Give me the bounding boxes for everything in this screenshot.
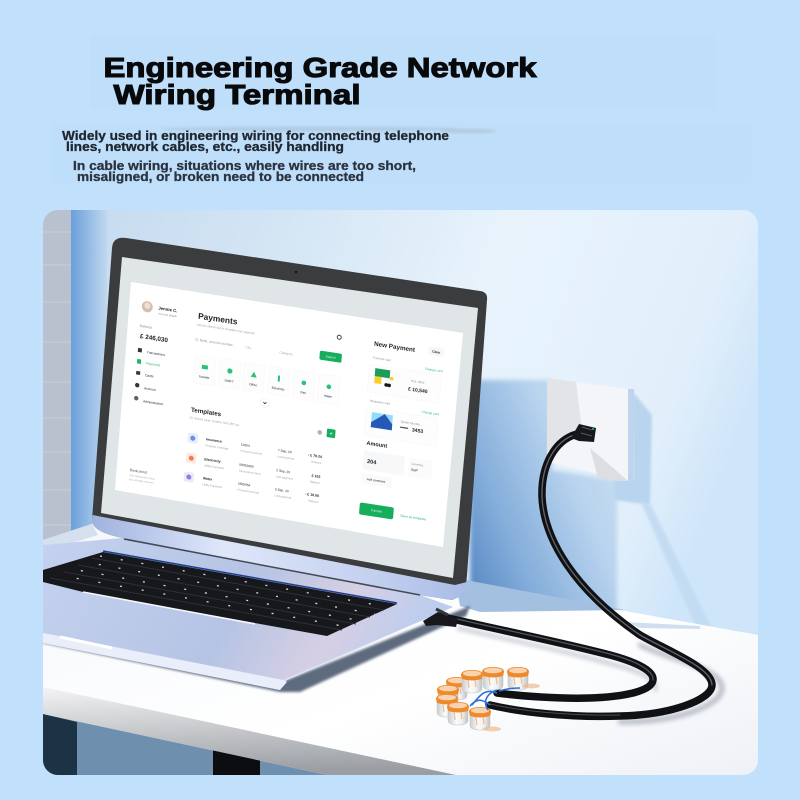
templates list: Balance [311,459,322,465]
faded backdrop behind header text [52,35,752,184]
templates list: Utility Payments [204,463,225,470]
wiring terminal connectors [436,667,540,732]
templates list: Property coverage [205,443,229,451]
templates list: Utility Payments [202,482,223,489]
keyboard [43,551,397,636]
templates list: 7 Sep, 20 [278,448,292,454]
templates list: + [329,431,333,438]
templates list: Templates [191,407,222,418]
sidebar profile and navigation: Cards [145,373,154,379]
templates list: 10254 [241,443,250,448]
new payment panel: Amount [366,441,388,450]
payment type tiles: SWIFT [224,378,234,384]
templates list: Electricity [204,457,221,464]
title [104,52,537,110]
new payment panel: Clear [432,350,441,355]
payment type tiles: Electricity [272,386,285,392]
new payment panel: New Payment [374,341,416,354]
templates list: 2 Sep, 20 [276,468,290,474]
payment type tiles: Office [249,382,257,387]
sidebar profile and navigation: App. All rights reserved [129,478,154,485]
sidebar profile and navigation: Account details [158,311,178,318]
network cable shadows [458,628,722,722]
RJ45 plug at wall [571,424,596,442]
laptop [43,238,487,692]
payments header and search: City [245,345,252,350]
sidebar profile and navigation: £ 246,030 [140,333,169,344]
network cables [448,434,712,716]
new payment panel: £ 10,540 [408,386,428,395]
templates list: - £ 10.50 [305,492,319,498]
sidebar profile and navigation: Payments [146,361,161,367]
templates list: Water [203,476,213,482]
left window frame [43,210,107,550]
title: Wiring Terminal [114,79,360,110]
sidebar profile and navigation [128,300,178,486]
payments header and search: Category [279,350,293,356]
templates list: - £ 70.24 [308,453,322,459]
sidebar profile and navigation: Transactions [147,350,166,357]
laptop screen [101,257,478,578]
wall socket plate [547,378,634,481]
new payment panel: Visa, 4829 [411,379,425,385]
templates list: Personal account [240,449,262,456]
payment type tiles: Transfer [198,374,210,380]
description text block: lines, network cables, etc., easily handling [66,139,344,154]
new payment panel: Spider foundry [400,420,421,427]
templates list: Personal account [239,469,261,476]
payment type tiles [198,364,332,408]
templates list: 2505054 [238,482,251,488]
description text block: Widely used in engineering wiring for connecting telephone [62,128,449,143]
lid chin [92,515,467,600]
new payment panel: Currency [411,462,424,468]
camera dot [295,271,297,273]
screen UI: payments dashboard [115,282,463,547]
new payment panel: GBP [411,468,418,473]
table surface [43,518,758,775]
wall [107,210,758,635]
templates list: 58051860 [239,463,254,469]
templates list: Last payment [277,454,295,461]
templates list [183,406,336,506]
templates list: 29, School Lane, London, N29 3RT car [189,415,239,427]
sidebar profile and navigation: 2021 Bankusmet Online [129,474,156,481]
payments header and search: Q. Bank, account number... [195,337,235,348]
laptop lid [92,238,487,600]
description text block: In cable wiring, situations where wires are too short, [73,158,416,173]
description text block [62,128,449,184]
templates list: £ 102 [311,474,321,479]
sidebar profile and navigation: Balance [140,324,153,330]
panel: product photo scene [43,210,758,778]
new payment panel: Change card [421,410,440,416]
new payment panel [358,337,445,525]
templates list: Personal account [237,488,259,495]
new payment panel: 204 [367,459,377,466]
title: Engineering Grade Network [104,52,537,83]
new payment panel: Save as template [400,514,426,522]
sidebar profile and navigation: Account [144,386,156,392]
description text block: misaligned, or broken need to be connected [77,169,364,184]
payment type tiles: Water [324,394,332,399]
templates list: Insurance [206,437,222,444]
sidebar profile and navigation: Jennie C. [158,305,178,313]
laptop base [43,538,453,690]
payments header and search: Payments [198,311,238,327]
templates list: Balance [308,498,319,504]
new payment panel: 3453 [412,427,424,435]
new payment panel: Transfer [370,508,383,514]
payments header and search: Use the search bar to complete your payment [196,322,255,335]
new payment panel: Add comment [367,477,386,484]
RJ45 plug at laptop [423,609,458,627]
blue wires [470,688,520,710]
payments header and search: Search [325,354,336,360]
laptop shadow on table [43,606,470,692]
new payment panel: From the card [373,356,392,362]
table front edge and under-desk area [43,687,470,778]
new payment panel: Recipient's card [370,399,391,406]
templates list: 5 Sep, 20 [275,487,289,493]
templates list: Last payment [276,474,293,481]
sidebar profile and navigation: Bankusmet. [130,468,148,475]
templates list: Balance [310,479,320,485]
payments header and search [195,311,344,364]
wall shadow of laptop [470,380,712,628]
templates list: Last payment [274,493,292,500]
payment type tiles: Gas [300,390,306,395]
new payment panel: Change card [425,367,443,373]
sidebar profile and navigation: Administration [143,399,164,406]
